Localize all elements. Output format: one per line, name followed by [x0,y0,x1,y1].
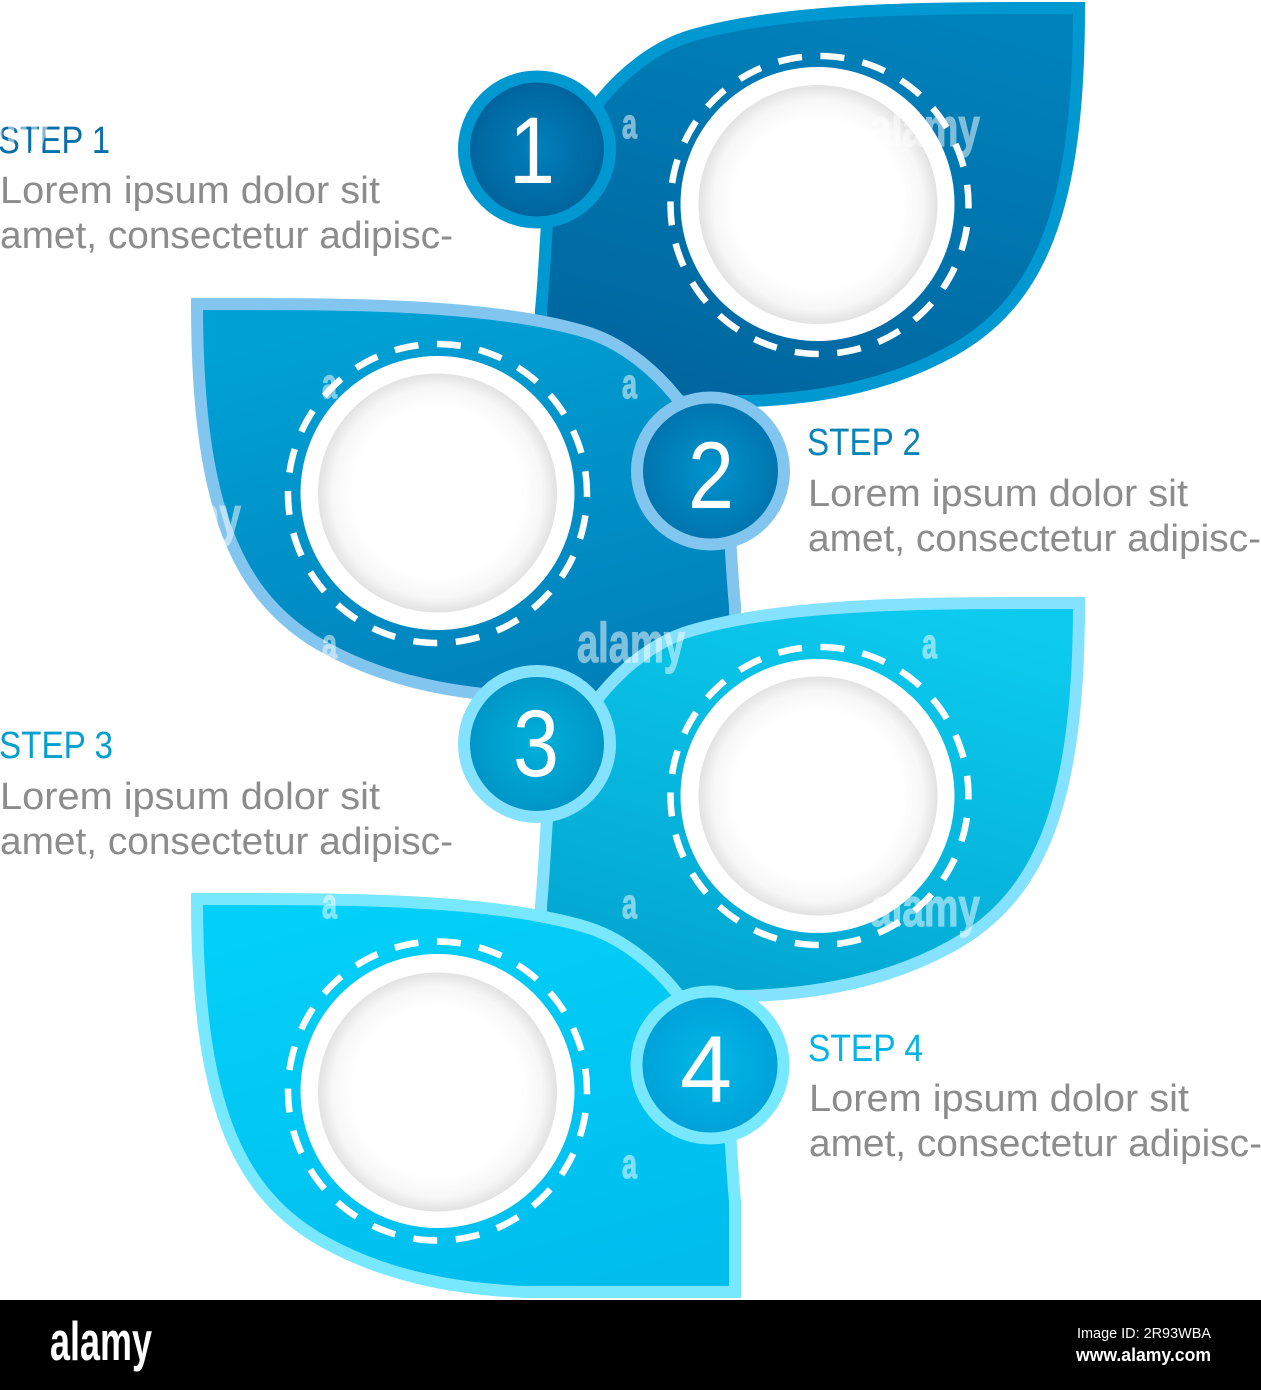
step 1 text [0,120,453,257]
dashed ring 1 [670,56,968,354]
leaf shape 2 [197,304,735,697]
watermarks: a [622,360,637,407]
watermarks: a [922,620,937,667]
dashed ring 4 [288,942,587,1240]
step 4 text: amet, consectetur adipisc- [809,1123,1261,1165]
footer logo: alamy [50,1310,152,1372]
step 4 text: STEP 4 [808,1028,923,1070]
step 2 text: amet, consectetur adipisc- [808,518,1261,560]
leaf panel 2 [197,304,735,697]
number badge 3 [464,671,610,817]
step 3 text: amet, consectetur adipisc- [0,821,453,863]
number badge 4 [636,992,784,1138]
footer bar [0,1300,1261,1390]
watermarks: a [622,1140,637,1187]
step 2 text [807,422,1261,560]
dashed ring 2 [288,344,587,643]
watermarks: alamy [870,98,980,158]
watermarks: alamy [870,878,980,938]
watermarks: alamy [131,487,241,547]
watermarks [0,98,980,1187]
step 2 text: Lorem ipsum dolor sit [808,473,1188,515]
number badge 2: 2 [688,423,734,529]
number badge 1 [464,76,610,222]
step 4 text [808,1028,1261,1165]
number badge 4: 4 [680,1017,732,1123]
leaf shape 3 [541,603,1079,996]
step 2 text: STEP 2 [807,422,921,464]
number badge 2 [637,398,784,544]
step 1 text: STEP 1 [0,120,110,162]
leaf shape 4 [197,899,735,1292]
watermarks: a [622,100,637,147]
watermarks: a [622,880,637,927]
step 3 text: Lorem ipsum dolor sit [0,776,380,818]
photo placeholder circle 2 [300,356,574,630]
step 1 text: Lorem ipsum dolor sit [0,170,380,212]
leaf panel 4 [197,899,735,1292]
image id: Image ID: 2R93WBA [1077,1325,1211,1342]
step 3 text [0,725,453,863]
footer url: www.alamy.com [1075,1345,1211,1365]
step 4 text: Lorem ipsum dolor sit [809,1078,1189,1120]
photo placeholder circle 4 [300,954,574,1228]
step 3 text: STEP 3 [0,725,113,767]
number badge 3: 3 [513,691,559,797]
leaf panel 3 [541,603,1079,996]
watermarks: a [322,360,337,407]
watermarks: a [322,620,337,667]
dashed ring 3 [670,647,968,945]
leaf shape 1 [541,8,1079,401]
number badge 1: 1 [509,98,555,204]
watermarks: a [322,880,337,927]
step 1 text: amet, consectetur adipisc- [0,215,453,257]
photo placeholder circle 1 [680,67,954,341]
photo placeholder circle 3 [680,659,954,933]
watermarks: alamy [577,611,685,674]
leaf panel 1 [541,8,1079,401]
